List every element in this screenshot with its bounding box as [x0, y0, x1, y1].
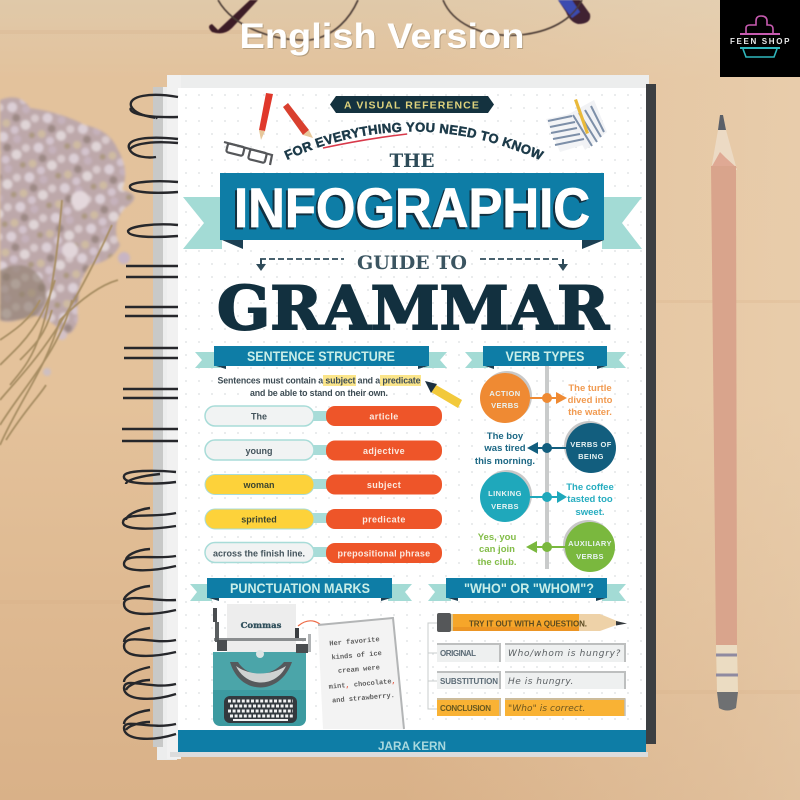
notebook body: [153, 75, 656, 760]
row: young / adjective: young: [246, 446, 272, 456]
verb: being: was tired: [483, 443, 526, 454]
section banner: who or whom: "WHO" OR "WHOM"?: [464, 580, 594, 596]
visual reference pill: A VISUAL REFERENCE: [344, 100, 480, 112]
heading: THE: THE: [390, 150, 434, 172]
section banner: verb types: VERB TYPES: [506, 348, 584, 364]
title banner: INFOGRAPHIC: INFOGRAPHIC: [234, 176, 590, 239]
icon: question pencil: [437, 613, 627, 632]
section banner: sentence structure: SENTENCE STRUCTURE: [247, 348, 395, 364]
timeline axis: [545, 366, 549, 569]
intro text with highlights: and be able to stand on their own.: [250, 388, 388, 398]
row: The / article: [205, 406, 442, 426]
heading: guide to with arrows: [256, 252, 568, 274]
verb: auxiliary: can join: [479, 544, 515, 555]
icon: reading glasses: [224, 142, 272, 165]
book cover page: [178, 88, 646, 730]
row: sprinted / predicate: [205, 509, 442, 529]
note paper with example: Her favorite: [329, 636, 380, 649]
verb: linking: sweet.: [575, 507, 605, 518]
row: substitution: He is hungry.: [508, 677, 574, 687]
title banner: INFOGRAPHIC: INFOGRAPHIC: [232, 178, 588, 241]
note paper with example: [318, 618, 404, 729]
row: conclusion: [437, 698, 625, 716]
verb: action: dived into: [568, 395, 613, 406]
verb: being: this morning.: [475, 456, 535, 467]
row: original: [437, 643, 625, 662]
row: young / adjective: adjective: [363, 446, 405, 456]
section banner: who or whom: [428, 578, 626, 601]
icon: red pencils: [259, 93, 313, 140]
note paper with example: mint, chocolate,: [328, 678, 396, 692]
row: original: ORIGINAL: [440, 649, 476, 658]
row: substitution: [437, 671, 625, 689]
intro text with highlights: [218, 375, 421, 398]
visual reference pill: [330, 96, 494, 113]
verb: being: The boy: [487, 431, 524, 442]
icon: question pencil: TRY IT OUT WITH A QUESTION.: [469, 620, 587, 628]
row: young / adjective: [205, 440, 442, 460]
note paper with example: cream were: [338, 664, 380, 676]
heading: guide to with arrows: GUIDE TO: [357, 252, 467, 274]
verb: auxiliary: VERBS: [576, 552, 604, 561]
verb: action: The turtle: [568, 383, 612, 394]
verb: auxiliary: AUXILIARY: [568, 539, 612, 548]
section banner: punctuation marks: [190, 578, 412, 601]
panel: who or whom: [428, 578, 627, 716]
verb: linking: [480, 470, 614, 522]
note paper with example: kinds of ice: [331, 650, 382, 662]
verb: being: VERBS OF: [570, 440, 612, 449]
verb: auxiliary: Yes, you: [478, 532, 516, 543]
verb: action: [480, 371, 613, 423]
section banner: sentence structure: [195, 346, 447, 369]
verb: linking: LINKING: [488, 489, 522, 498]
verb: action: ACTION: [489, 389, 521, 398]
shop logo: FEEN SHOP: [730, 37, 790, 46]
spiral binding: [122, 95, 178, 739]
row: sprinted / predicate: predicate: [362, 514, 406, 524]
row: conclusion: "Who" is correct.: [508, 704, 586, 714]
panel: punctuation marks: [190, 578, 412, 729]
panel: sentence structure: [195, 346, 462, 563]
icon: highlighter: [425, 381, 462, 408]
row: woman / subject: [205, 474, 442, 494]
eyeglasses at the top: [209, 0, 590, 40]
verb: being: BEING: [578, 452, 604, 461]
note paper with example: and strawberry.: [332, 692, 395, 706]
row: original: Who/whom is hungry?: [508, 649, 621, 659]
dried flower bouquet: [0, 97, 134, 445]
shop logo: [720, 0, 800, 77]
verb: being: [475, 421, 616, 473]
row: across the finish line / prepositional phrase: [205, 542, 442, 563]
overlay label: English Version: English Version: [240, 18, 526, 57]
verb: action: VERBS: [491, 401, 519, 410]
row: The / article: article: [369, 412, 399, 422]
verb: auxiliary: the club.: [477, 557, 517, 568]
pencil on table: [711, 115, 738, 710]
arrow: commas to note: [298, 621, 328, 633]
section banner: punctuation marks: PUNCTUATION MARKS: [230, 580, 370, 596]
author footer bar: JARA KERN: [378, 741, 446, 753]
connector bracket: [428, 623, 437, 709]
author footer bar: [178, 730, 646, 753]
row: across the finish line / prepositional phrase: prepositional phrase: [338, 548, 430, 558]
heading: GRAMMAR: GRAMMAR: [217, 274, 610, 344]
row: woman / subject: subject: [367, 480, 401, 490]
row: conclusion: CONCLUSION: [440, 704, 491, 713]
verb: linking: tasted too: [567, 494, 613, 505]
intro text with highlights: Sentences must contain a subject and a predicate: [218, 376, 421, 386]
verb: action: the water.: [568, 407, 612, 418]
icon: typewriter: [213, 604, 311, 726]
section banner: verb types: [465, 346, 626, 369]
overlay label: English Version: English Version: [240, 17, 524, 56]
row: woman / subject: woman: [242, 480, 275, 490]
verb: linking: The coffee: [566, 482, 614, 493]
row: The / article: The: [251, 412, 267, 422]
row: sprinted / predicate: sprinted: [241, 514, 277, 524]
panel: verb types: [465, 346, 626, 572]
icon: typewriter: Commas: [241, 621, 282, 631]
arched subtitle: FOR EVERYTHING YOU NEED TO KNOW: [284, 122, 544, 160]
verb: auxiliary: [477, 520, 615, 572]
icon: papers with pencil: [546, 99, 607, 152]
verb: linking: VERBS: [491, 502, 519, 511]
row: across the finish line / prepositional phrase: across the finish line.: [213, 548, 305, 558]
row: substitution: SUBSTITUTION: [440, 677, 498, 686]
